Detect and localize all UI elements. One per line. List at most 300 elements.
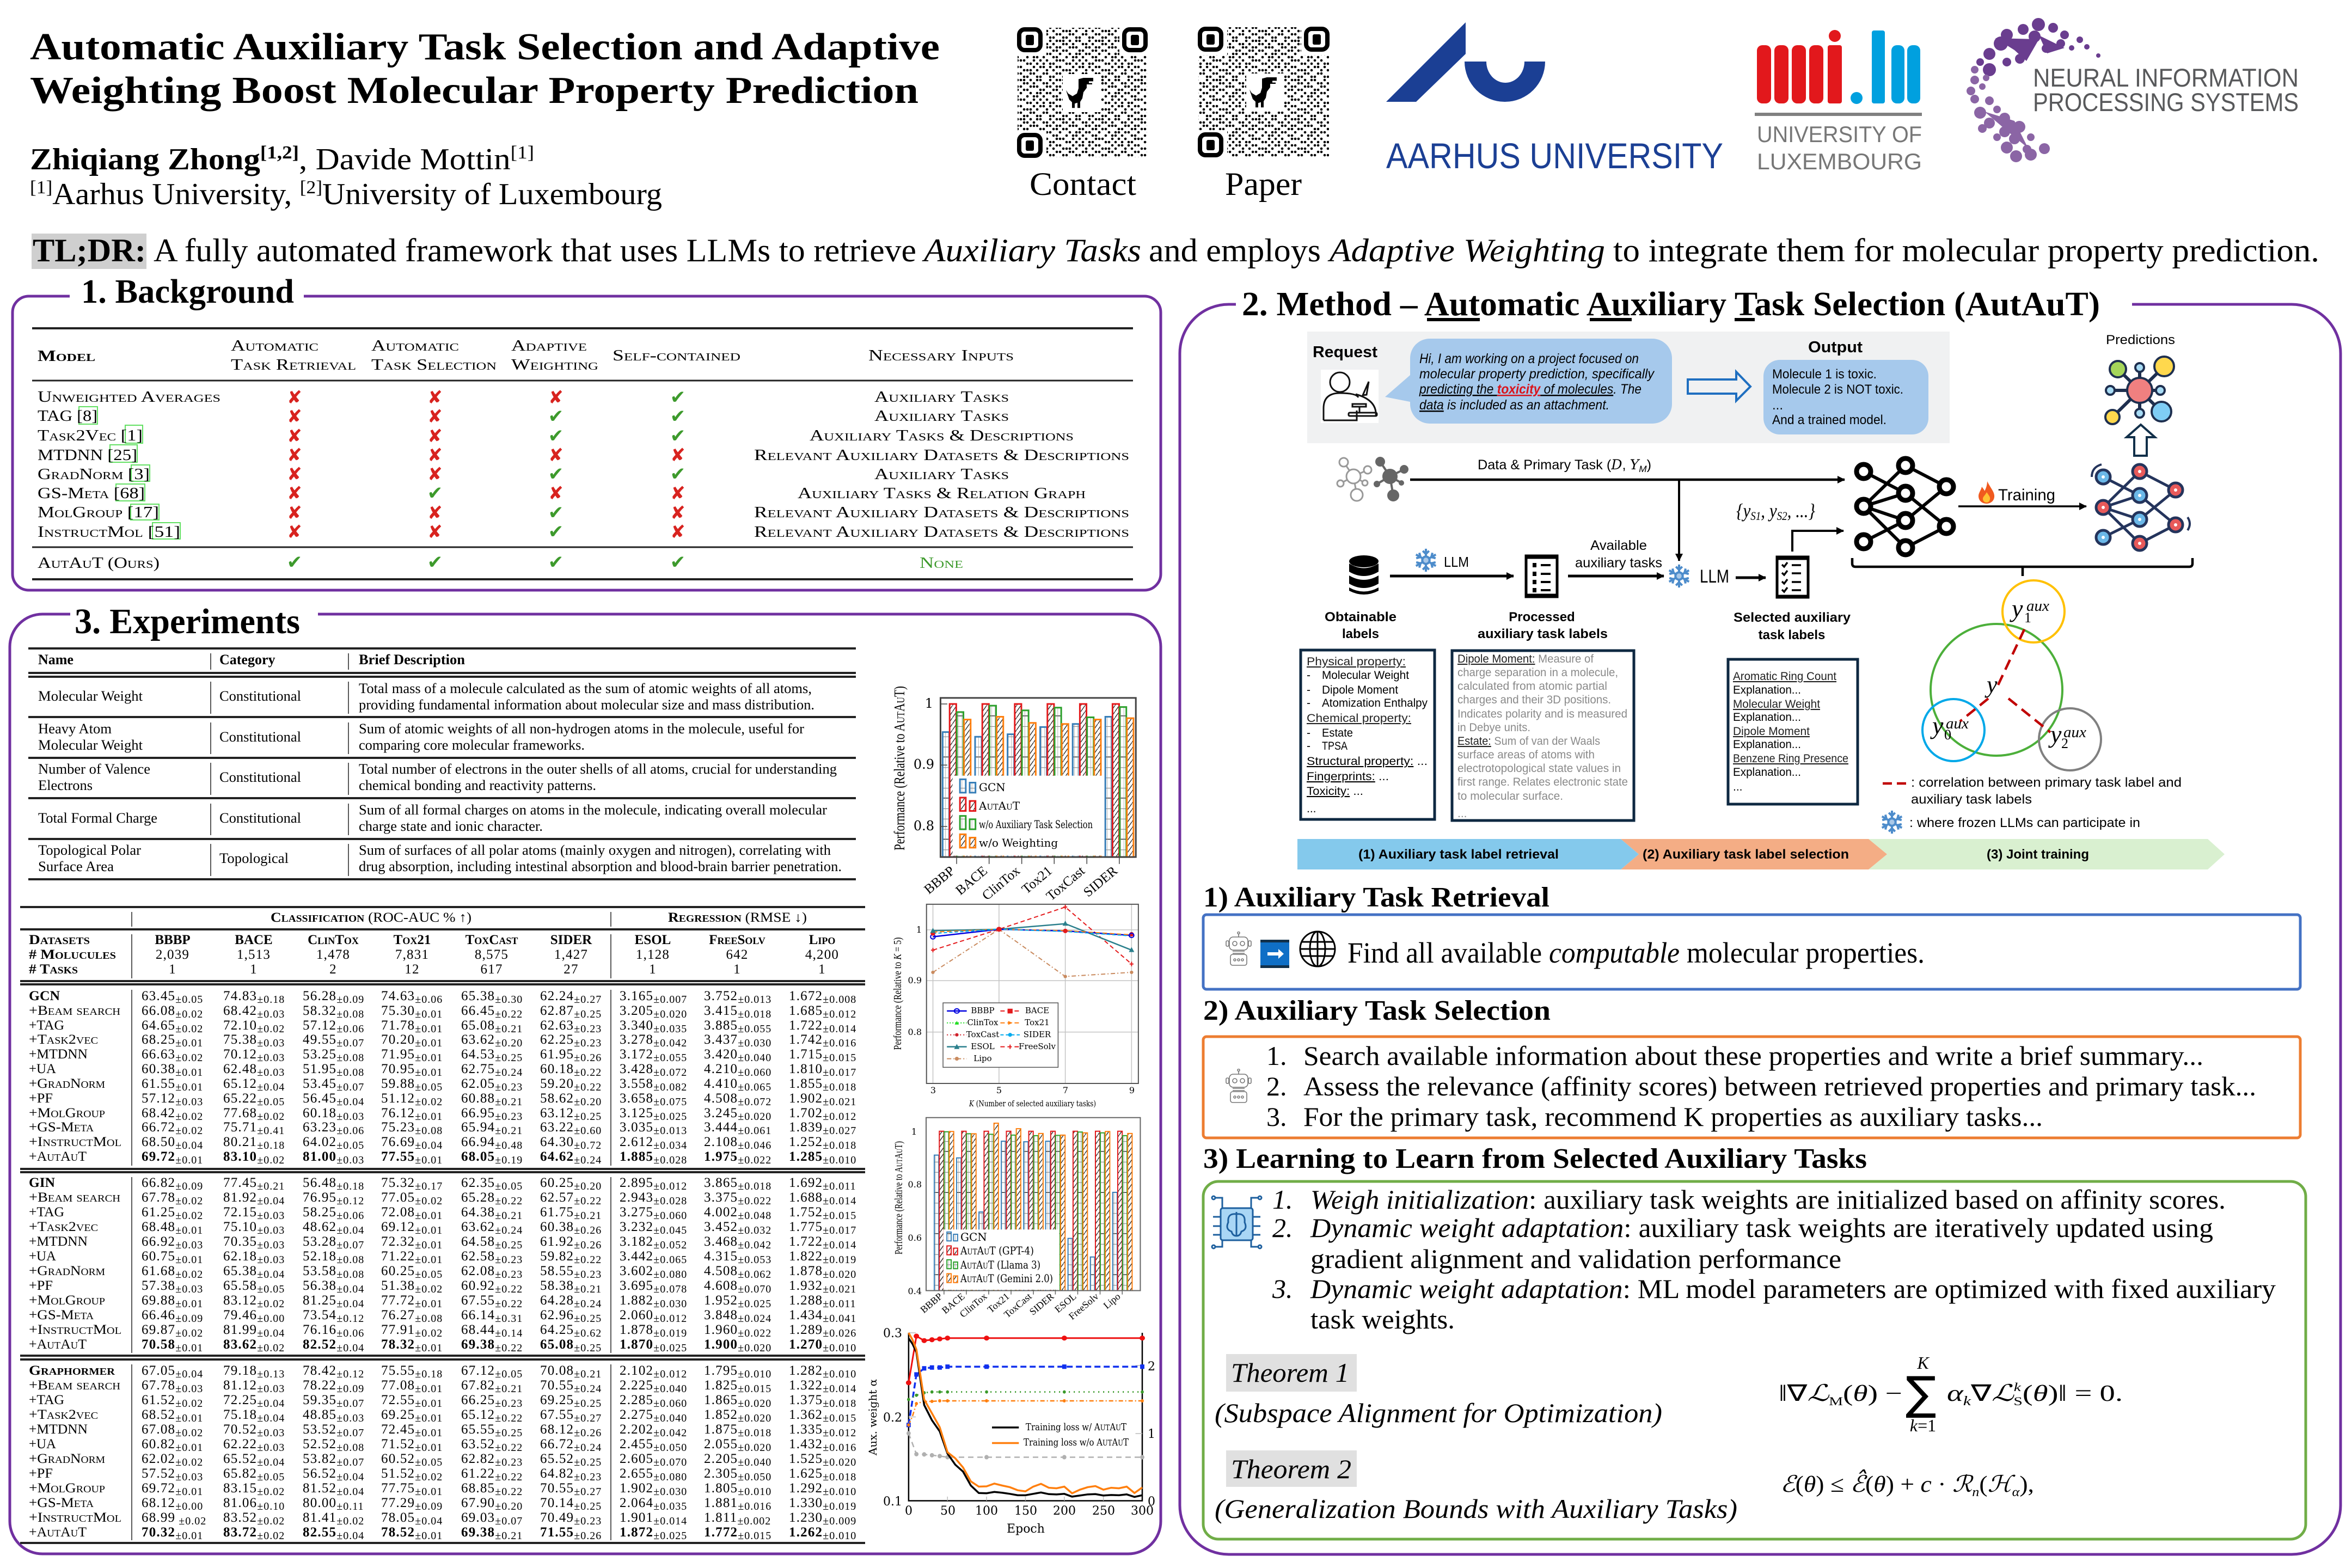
results: GIN: 66.14	[461, 1308, 495, 1322]
results: GCN: ±0.02	[257, 1154, 285, 1166]
table: model comparison: Unweighted Averages	[38, 389, 220, 406]
results: GCN: 3.278	[620, 1032, 653, 1047]
panel: obtainable labels: labels	[1342, 627, 1379, 641]
results: GCN: 3.340	[620, 1018, 653, 1033]
table: auxiliary task descriptions: Molecular Weight	[38, 737, 143, 753]
results: GCN: 51.95	[303, 1062, 336, 1076]
results: Graphormer: Graphormer	[29, 1363, 115, 1378]
arrow: primary task to LLM	[1678, 480, 1680, 561]
results: GIN: ±0.08	[415, 1313, 443, 1325]
chart: LLM comparison bar chart: 0.8	[908, 1179, 922, 1190]
results: Graphormer: 2.055	[704, 1437, 738, 1451]
results: Graphormer: ±0.01	[175, 1412, 203, 1424]
equation: theorem 1: (	[2023, 1381, 2033, 1406]
results: GIN: 2.943	[620, 1190, 653, 1205]
results: Graphormer: ±0.040	[653, 1412, 687, 1424]
results: GCN: ±0.25	[574, 1111, 602, 1123]
results: Graphormer: ±0.01	[415, 1383, 443, 1395]
table: model comparison: Relevant Auxiliary Datasets & Descriptions	[754, 504, 1129, 521]
results: Graphormer: 62.82	[461, 1451, 495, 1466]
results: Graphormer: 80.00	[303, 1496, 336, 1510]
panel: processed auxiliary task labels: Processed	[1509, 610, 1575, 624]
chart: LLM comparison bar chart: BBBP	[918, 1291, 945, 1315]
equation: theorem 1: k	[2014, 1380, 2022, 1394]
results: Graphormer: ±0.23	[495, 1398, 523, 1410]
panel: obtainable labels: -	[1307, 684, 1310, 696]
results: GIN: ±0.25	[495, 1239, 523, 1251]
results: GIN: 51.38	[381, 1278, 415, 1293]
results: Graphormer: ±0.016	[823, 1442, 856, 1454]
chart: auxiliary weights and training loss: 0	[1148, 1495, 1155, 1509]
table: model comparison: MTDNN [25]	[38, 447, 137, 464]
table: auxiliary task descriptions: Molecular Weight	[38, 688, 143, 704]
results: GIN: 3.865	[704, 1175, 738, 1190]
diagram: task label correlation circles: 2	[2061, 736, 2068, 751]
results: Graphormer: 69.25	[540, 1393, 574, 1407]
results: Graphormer: 2.225	[620, 1378, 653, 1393]
diagram: task label correlation circles: y	[2010, 595, 2023, 622]
results: GCN: ±0.01	[415, 1037, 443, 1049]
table: model comparison: ✘	[427, 521, 443, 542]
panel: processed auxiliary task labels: to molecular surface.	[1457, 790, 1563, 803]
panel: request and output: Request	[1313, 344, 1377, 361]
heading: learning to learn: 3) Learning to Learn from Selected Auxiliary Tasks	[1203, 1143, 1867, 1174]
results: Graphormer: 68.12	[142, 1496, 175, 1510]
chart: auxiliary weights and training loss: 0.2	[883, 1411, 902, 1425]
results: GIN: 3.695	[620, 1278, 653, 1293]
results: GCN: 83.10	[223, 1149, 257, 1164]
results: GIN: +AutAuT	[29, 1337, 87, 1352]
table: model comparison: Auxiliary Tasks	[874, 408, 1009, 425]
results: GIN: ±0.01	[415, 1239, 443, 1251]
results: GCN: ±0.042	[653, 1037, 687, 1049]
icon: robot	[1226, 932, 1251, 965]
results: Graphormer: ±0.010	[823, 1530, 856, 1542]
panel: 2. Method: , y	[1761, 500, 1777, 522]
results: GCN: 58.62	[540, 1091, 574, 1106]
affiliations: Aarhus University,	[52, 177, 300, 211]
results: Graphormer: ±0.25	[574, 1398, 602, 1410]
table: model comparison: Task Selection	[371, 357, 497, 373]
chart: ablation bar chart: 0.8	[914, 818, 934, 834]
results: GCN: ±0.028	[653, 1154, 687, 1166]
results: GIN: ±0.26	[574, 1224, 602, 1236]
label: training: Training	[1998, 486, 2055, 504]
results: Graphormer: 67.78	[142, 1378, 175, 1393]
results: GCN: 63.45	[142, 989, 175, 1003]
chart: ablation bar chart: 1	[925, 696, 933, 711]
results: Graphormer: 72.25	[223, 1393, 257, 1407]
results: GCN: ±0.061	[738, 1125, 771, 1137]
results: Graphormer: 1.292	[789, 1481, 823, 1496]
results: GIN: 62.18	[223, 1249, 257, 1264]
results: GIN: ±0.012	[653, 1180, 687, 1192]
chart: ablation bar chart: Performance (Relative to AUTAUT)	[891, 686, 908, 850]
results: GIN: 4.608	[704, 1278, 738, 1293]
results: GIN: ±0.019	[823, 1254, 856, 1266]
results: GIN: 60.92	[461, 1278, 495, 1293]
results: GCN: ±0.22	[574, 1067, 602, 1079]
results: GCN: 60.38	[142, 1062, 175, 1076]
results: Graphormer: 65.55	[461, 1422, 495, 1437]
panel: obtainable labels: -	[1307, 727, 1310, 739]
results: GIN: ±0.014	[823, 1195, 856, 1207]
results: Graphormer: 81.06	[223, 1496, 257, 1510]
results: Graphormer: ±0.009	[823, 1515, 856, 1527]
panel: processed auxiliary task labels: calculated from atomic partial	[1457, 680, 1607, 693]
results: GCN: ±0.046	[738, 1140, 771, 1152]
results: GCN: ±0.034	[653, 1140, 687, 1152]
results: Graphormer: 70.55	[540, 1481, 574, 1496]
results: GIN: ±0.17	[415, 1180, 443, 1192]
panel: processed auxiliary task labels: Indicates polarity and is measured	[1457, 708, 1627, 720]
table: model comparison: ✘	[287, 482, 302, 504]
results: GIN: 77.91	[381, 1322, 415, 1337]
results: Graphormer: ±0.010	[738, 1368, 771, 1380]
results: GCN: 4.508	[704, 1091, 738, 1106]
table: model comparison: ✘	[670, 444, 685, 465]
results: GIN: ±0.053	[738, 1254, 771, 1266]
chart: sensitivity to K line chart: 7	[1063, 1085, 1068, 1095]
results: GIN: 68.44	[461, 1322, 495, 1337]
results: GCN: 66.72	[142, 1120, 175, 1135]
results: GIN: 3.442	[620, 1249, 653, 1264]
theorem 1	[1215, 1354, 1662, 1428]
results: GCN: 65.08	[461, 1018, 495, 1033]
process arrow band: (2) Auxiliary task label selection	[1643, 847, 1849, 862]
results: GIN: ±0.02	[175, 1269, 203, 1281]
equation: theorem 2: n	[1972, 1485, 1979, 1499]
results: Graphormer: 66.25	[461, 1393, 495, 1407]
results: Graphormer: 1.362	[789, 1407, 823, 1422]
results: GIN: ±0.00	[257, 1313, 285, 1325]
chart: auxiliary weights and training loss: Aux. weight α	[866, 1379, 879, 1456]
results: GIN: ±0.024	[738, 1313, 771, 1325]
chart: sensitivity to K line chart: Performance (Relative to K = 5)	[892, 938, 904, 1050]
results: GIN: ±0.05	[495, 1180, 523, 1192]
results: GIN: 70.35	[223, 1234, 257, 1249]
results: GCN: ±0.02	[257, 1111, 285, 1123]
results: Graphormer: +Beam search	[29, 1378, 120, 1393]
panel: selected auxiliary task labels: Explanation...	[1733, 738, 1801, 751]
speech bubble: request: molecular property prediction, specifically	[1419, 366, 1655, 382]
results: Graphormer: ±0.03	[257, 1383, 285, 1395]
table: model comparison: ✘	[670, 482, 685, 504]
icon: database	[1349, 555, 1379, 595]
results: Graphormer: 1.902	[620, 1481, 653, 1496]
results: Graphormer: 78.42	[303, 1363, 336, 1378]
results: GIN: ±0.014	[823, 1239, 856, 1251]
results: GCN: +InstructMol	[29, 1135, 121, 1149]
results: GCN: ±0.018	[823, 1140, 856, 1152]
results: GCN: ±0.01	[415, 1052, 443, 1064]
table: model comparison: ✘	[548, 387, 564, 408]
results: GCN: ±0.02	[175, 1008, 203, 1020]
panel: selected auxiliary task labels: Benzene Ring Presence	[1733, 752, 1848, 765]
table: auxiliary task descriptions: Total Formal Charge	[38, 810, 157, 826]
panel: selection: For the primary task, recommend K properties as auxiliary tasks...	[1303, 1101, 2043, 1132]
results: Graphormer: ±0.03	[175, 1471, 203, 1483]
panel: learning to learn: 2.	[1272, 1212, 1293, 1243]
results: Graphormer: +TAG	[29, 1393, 64, 1407]
panel: 2. Method: LLM	[1444, 554, 1469, 570]
results: Graphormer: 48.85	[303, 1407, 336, 1422]
results: Graphormer: 78.05	[381, 1510, 415, 1525]
results: GIN: 67.78	[142, 1190, 175, 1205]
results: Graphormer: ±0.09	[415, 1500, 443, 1512]
results: GCN: ±0.082	[653, 1081, 687, 1093]
results: Graphormer: +AutAuT	[29, 1525, 87, 1540]
results: Graphormer: 1.230	[789, 1510, 823, 1525]
equation: theorem 1: ‖∇ ℒ	[1779, 1380, 1824, 1406]
results: Graphormer: ±0.070	[653, 1456, 687, 1468]
results: Graphormer: ±0.015	[738, 1383, 771, 1395]
results: GIN: ±0.011	[823, 1180, 856, 1192]
results: GCN: ±0.60	[574, 1125, 602, 1137]
results: Graphormer: 53.82	[303, 1451, 336, 1466]
icon: list	[1525, 556, 1558, 597]
results: Graphormer: 2.605	[620, 1451, 653, 1466]
panel: processed auxiliary task labels: charge separation in a molecule,	[1457, 666, 1618, 679]
results: GIN: ±0.03	[257, 1210, 285, 1222]
results: GCN: 49.55	[303, 1032, 336, 1047]
chart: ablation bar chart: w/o Auxiliary Task Selection	[979, 818, 1093, 831]
table: auxiliary task descriptions: chemical bonding and reactivity patterns.	[359, 777, 596, 793]
theorem 2: (Generalization Bounds with Auxiliary Tasks)	[1215, 1493, 1737, 1524]
results: GIN: 71.22	[381, 1249, 415, 1264]
results: GIN: 72.15	[223, 1205, 257, 1220]
results: GCN: 66.94	[461, 1135, 495, 1149]
legend: correlation	[1883, 775, 2182, 807]
results: Graphormer: ±0.01	[415, 1412, 443, 1424]
process arrow band	[1297, 839, 2225, 869]
results: GIN: 60.25	[381, 1264, 415, 1278]
results: Graphormer: +UA	[29, 1437, 56, 1451]
results: GCN: 3.125	[620, 1106, 653, 1120]
equation: theorem 1: S	[2013, 1394, 2023, 1408]
results: GIN: 64.28	[540, 1293, 574, 1308]
results: Graphormer: ±0.02	[175, 1515, 206, 1527]
results: GIN: 1.932	[789, 1278, 823, 1293]
results: GIN: 62.58	[461, 1249, 495, 1264]
results: Graphormer: ±0.050	[738, 1471, 771, 1483]
results: Graphormer: +GS-Meta	[29, 1496, 94, 1510]
results: GCN: ±0.013	[738, 994, 771, 1006]
results: GCN: ±0.040	[738, 1052, 771, 1064]
logo: University of Luxembourg: LUXEMBOURG	[1757, 149, 1922, 174]
results: Graphormer: ±0.010	[823, 1486, 856, 1498]
results: GCN: 53.25	[303, 1047, 336, 1062]
table: results: 1	[818, 962, 826, 977]
results: Graphormer: 82.55	[303, 1525, 336, 1540]
results: GCN: ±0.02	[257, 1023, 285, 1035]
results: Graphormer: +PF	[29, 1466, 53, 1481]
results: Graphormer: ±0.01	[415, 1486, 443, 1498]
results: GIN: ±0.07	[336, 1239, 364, 1251]
results: GIN: ±0.041	[823, 1313, 856, 1325]
results: GCN: ±0.06	[415, 994, 443, 1006]
results: GIN: ±0.04	[336, 1283, 364, 1295]
results: GCN: 3.658	[620, 1091, 653, 1106]
results: GIN: +GS-Meta	[29, 1308, 94, 1322]
table: auxiliary task descriptions: Category	[219, 652, 275, 667]
chart: auxiliary weights and training loss: 250	[1092, 1504, 1115, 1518]
equation: theorem 1: K	[1916, 1353, 1930, 1373]
logo: NeurIPS: NEURAL INFORMATION	[2033, 63, 2299, 92]
diagram: task label correlation circles: 0	[1944, 727, 1951, 743]
results: GIN: 59.82	[540, 1249, 574, 1264]
results: Graphormer: ±0.04	[336, 1530, 364, 1542]
results: GIN: 1.288	[789, 1293, 823, 1308]
panel: obtainable labels: -	[1307, 740, 1310, 752]
chart: ablation bar chart: ToxCast	[1044, 863, 1088, 904]
chart: ablation bar chart: BBBP	[922, 863, 958, 897]
results: GIN: 4.508	[704, 1264, 738, 1278]
results: GIN: ±0.05	[415, 1269, 443, 1281]
panel: request and output	[1307, 332, 1950, 443]
panel: selection: 2.	[1266, 1071, 1287, 1101]
results: Graphormer: 2.655	[620, 1466, 653, 1481]
results: GCN: ±0.03	[257, 1037, 285, 1049]
table: model comparison: ✘	[287, 425, 302, 446]
table: results: 1,427	[554, 947, 588, 962]
results: GCN: 64.30	[540, 1135, 574, 1149]
panel: obtainable labels: Fingerprints: ...	[1307, 770, 1389, 783]
results: GIN: ±0.017	[823, 1224, 856, 1236]
results: Graphormer: 61.52	[142, 1393, 175, 1407]
panel: learning to learn	[1203, 1181, 2306, 1539]
results: GIN: ±0.019	[653, 1327, 687, 1339]
table: model comparison: ✔	[670, 425, 685, 447]
authors: [1]	[511, 143, 534, 163]
results: Graphormer: 67.82	[461, 1378, 495, 1393]
results: GCN: 3.172	[620, 1047, 653, 1062]
results: Graphormer: 64.82	[540, 1466, 574, 1481]
results: GCN: ±0.04	[415, 1140, 443, 1152]
table: auxiliary task descriptions: Constitutional	[219, 769, 301, 785]
results: Graphormer: 70.08	[540, 1363, 574, 1378]
results: Graphormer: 83.52	[223, 1510, 257, 1525]
table: auxiliary task descriptions: Number of Valence	[38, 761, 150, 777]
chart: auxiliary weights and training loss: 0.3	[883, 1327, 902, 1340]
heading: Experiments: 3. Experiments	[75, 602, 300, 641]
results: Graphormer: ±0.04	[336, 1486, 364, 1498]
results: Graphormer: 65.12	[461, 1407, 495, 1422]
results: GCN: 62.75	[461, 1062, 495, 1076]
equation: theorem 1: k=1	[1910, 1416, 1936, 1435]
results: Graphormer: 77.29	[381, 1496, 415, 1510]
authors: Zhiqiang Zhong	[30, 143, 260, 176]
results: Graphormer: 1.335	[789, 1422, 823, 1437]
table: model comparison: ✘	[670, 502, 685, 523]
results: GIN: 1.722	[789, 1234, 823, 1249]
equation: theorem 1: k	[1963, 1394, 1971, 1408]
results: GCN: 80.21	[223, 1135, 257, 1149]
results: GIN: 62.35	[461, 1175, 495, 1190]
results: GCN: ±0.22	[574, 1081, 602, 1093]
results: GCN: ±0.20	[495, 1037, 523, 1049]
table: model comparison: Auxiliary Tasks	[874, 466, 1009, 483]
results: Graphormer: ±0.23	[574, 1515, 602, 1527]
results: GIN: 52.18	[303, 1249, 336, 1264]
results: Graphormer: ±0.04	[415, 1515, 443, 1527]
chart: LLM comparison bar chart: 0.4	[908, 1286, 922, 1296]
equation: theorem 2: ),	[2019, 1472, 2034, 1497]
icon: robot	[1226, 1069, 1251, 1102]
panel: processed auxiliary task labels: Dipole Moment: Measure of	[1457, 653, 1594, 665]
results: GIN: 57.38	[142, 1278, 175, 1293]
results: GCN: ±0.72	[574, 1140, 602, 1152]
results: GCN: 1.685	[789, 1003, 823, 1018]
results: GCN: 75.23	[381, 1120, 415, 1135]
table: auxiliary task descriptions: Name	[38, 652, 74, 667]
theorem 1: (Subspace Alignment for Optimization)	[1215, 1398, 1662, 1428]
panel: obtainable labels: -	[1307, 697, 1310, 709]
results: GCN: +PF	[29, 1091, 53, 1106]
results: Graphormer: ±0.015	[738, 1530, 771, 1542]
results: Graphormer: 67.12	[461, 1363, 495, 1378]
results: GIN: ±0.02	[175, 1195, 203, 1207]
results: Graphormer: 72.55	[381, 1393, 415, 1407]
table: auxiliary task descriptions: Constitutional	[219, 688, 301, 704]
results: Graphormer: 1.282	[789, 1363, 823, 1378]
results: Graphormer: 53.52	[303, 1422, 336, 1437]
table: model comparison: ✘	[287, 521, 302, 542]
results: GCN: ±0.23	[574, 1023, 602, 1035]
table: results: 1,128	[636, 947, 670, 962]
results: GIN: 53.28	[303, 1234, 336, 1249]
panel: processed auxiliary task labels: electrotopological state values in	[1457, 762, 1621, 775]
table: model comparison: ✘	[287, 406, 302, 427]
table: model comparison: ✔	[548, 502, 564, 524]
results: GCN: 3.420	[704, 1047, 738, 1062]
results: GCN: ±0.01	[175, 1081, 203, 1093]
results: GCN: +MolGroup	[29, 1106, 105, 1120]
chart: auxiliary weights and training loss: 2	[1148, 1360, 1155, 1374]
equation: theorem 1: ∇	[1970, 1381, 1992, 1406]
results: Graphormer: 1.881	[704, 1496, 738, 1510]
panel: processed auxiliary task labels: charges and their 3D positions.	[1457, 694, 1611, 706]
results: GIN: 68.48	[142, 1220, 175, 1234]
table: model comparison: ✔	[287, 552, 302, 573]
chart: sensitivity to K line chart: BACE	[1025, 1006, 1049, 1015]
results: GCN: ±0.41	[257, 1125, 285, 1137]
results: GIN: 69.88	[142, 1293, 175, 1308]
results: GIN: ±0.028	[653, 1195, 687, 1207]
results: GIN: ±0.078	[653, 1283, 687, 1295]
results: GCN: 2.108	[704, 1135, 738, 1149]
results: Graphormer: ±0.07	[336, 1427, 364, 1439]
results: GIN: ±0.011	[823, 1298, 856, 1310]
results: GIN: ±0.03	[257, 1239, 285, 1251]
table: auxiliary task descriptions: Heavy Atom	[38, 721, 112, 737]
results: Graphormer: ±0.21	[495, 1530, 523, 1542]
chart: auxiliary weights and training loss: 0.1	[883, 1495, 902, 1509]
results: GCN: ±0.03	[257, 1052, 285, 1064]
results: Graphormer: 61.22	[461, 1466, 495, 1481]
table: auxiliary task descriptions: Sum of all formal charges on atoms in the molecule, indicating overall molecular	[359, 802, 827, 818]
results: GIN: 56.38	[303, 1278, 336, 1293]
table: results: 2	[329, 962, 337, 977]
panel: selection: Assess the relevance (affinity scores) between retrieved properties and primary task...	[1303, 1071, 2256, 1101]
results: Graphormer: ±0.23	[574, 1471, 602, 1483]
results: Graphormer: 57.52	[142, 1466, 175, 1481]
equation: theorem 1: ∑	[1906, 1367, 1937, 1420]
results: GCN: 2.612	[620, 1135, 653, 1149]
results: GCN: 64.53	[461, 1047, 495, 1062]
results: Graphormer: ±0.26	[574, 1427, 602, 1439]
chart: LLM comparison bar chart: ESOL	[1052, 1291, 1079, 1315]
